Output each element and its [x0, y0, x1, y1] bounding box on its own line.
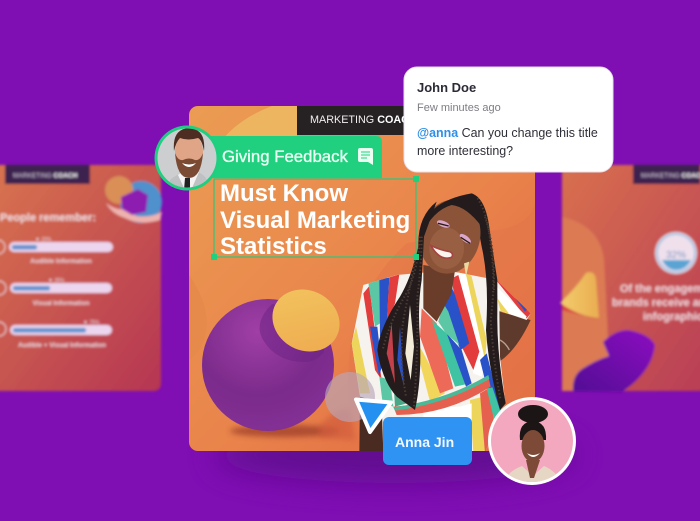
brand bar: [297, 106, 404, 135]
left slide bar 3: Audible + Visual Information: [18, 342, 106, 349]
right slide brand bar: [633, 165, 700, 184]
comment author: John Doe: [417, 80, 476, 95]
title: Must Know: [220, 180, 348, 207]
selection box: [211, 176, 419, 260]
cursor halo: [325, 372, 375, 422]
comment card: more interesting?: [417, 144, 513, 158]
left slide bar 3: ▼ 75%: [83, 320, 100, 326]
dress stripes: [350, 270, 533, 457]
icon: comment: [358, 148, 373, 165]
brand bar: MARKETING COACH: [310, 114, 417, 126]
panel: main slide: [189, 106, 535, 457]
braids right: [472, 193, 506, 410]
braids left: [377, 202, 437, 410]
title: Statistics: [220, 233, 327, 260]
smile: [431, 245, 453, 258]
neck and chest: [423, 265, 455, 322]
left slide bar 3: [0, 320, 112, 349]
tag: giving feedback: [200, 136, 382, 178]
bracelet: [500, 340, 509, 350]
arrow: cursor: [356, 400, 391, 432]
avatar: Anna: [488, 397, 576, 485]
left slide brand bar: MARKETING COACH: [13, 172, 78, 180]
title: [220, 180, 410, 260]
left slide illustration: [105, 176, 162, 223]
hair cap: [429, 193, 480, 224]
tag: giving feedback: Giving Feedback: [222, 147, 349, 166]
eye makeup: [437, 220, 450, 228]
earring: [464, 262, 469, 277]
left slide brand bar: [5, 165, 90, 184]
illustration: purple ball with yellow disc: [202, 290, 340, 431]
comment time: Few minutes ago: [417, 102, 501, 114]
right slide percent donut: 32%: [666, 250, 686, 261]
right slide percent donut: [655, 232, 697, 274]
left slide bar 2: [0, 278, 112, 307]
label: Anna Jin: [383, 417, 472, 465]
title: Visual Marketing: [220, 207, 410, 234]
woman in striped dress: [350, 193, 533, 457]
panel: left blurred slide: [0, 165, 162, 391]
left slide heading: People remember:: [0, 212, 96, 224]
left slide bar 1: Audible Information: [30, 258, 92, 265]
right slide cone: [562, 304, 599, 320]
avatar: man: [154, 126, 220, 190]
belt and skirt: [470, 397, 487, 453]
arms: [499, 312, 531, 362]
right sleeve stripes: [496, 280, 531, 318]
ball shadow: [230, 425, 340, 437]
left slide bar 2: ▼ 35%: [48, 278, 65, 284]
left slide bar 1: [0, 237, 113, 265]
left slide bar 2: Visual Information: [33, 300, 89, 307]
panel: right blurred slide: [560, 165, 700, 392]
label: Anna Jin: Anna Jin: [395, 434, 454, 450]
face: [423, 200, 480, 274]
right slide purple disc: [573, 330, 655, 392]
left slide bar 1: ▼ 20%: [35, 237, 52, 243]
comment card: [404, 67, 613, 172]
comment body: @anna Can you change this title: [417, 126, 598, 140]
